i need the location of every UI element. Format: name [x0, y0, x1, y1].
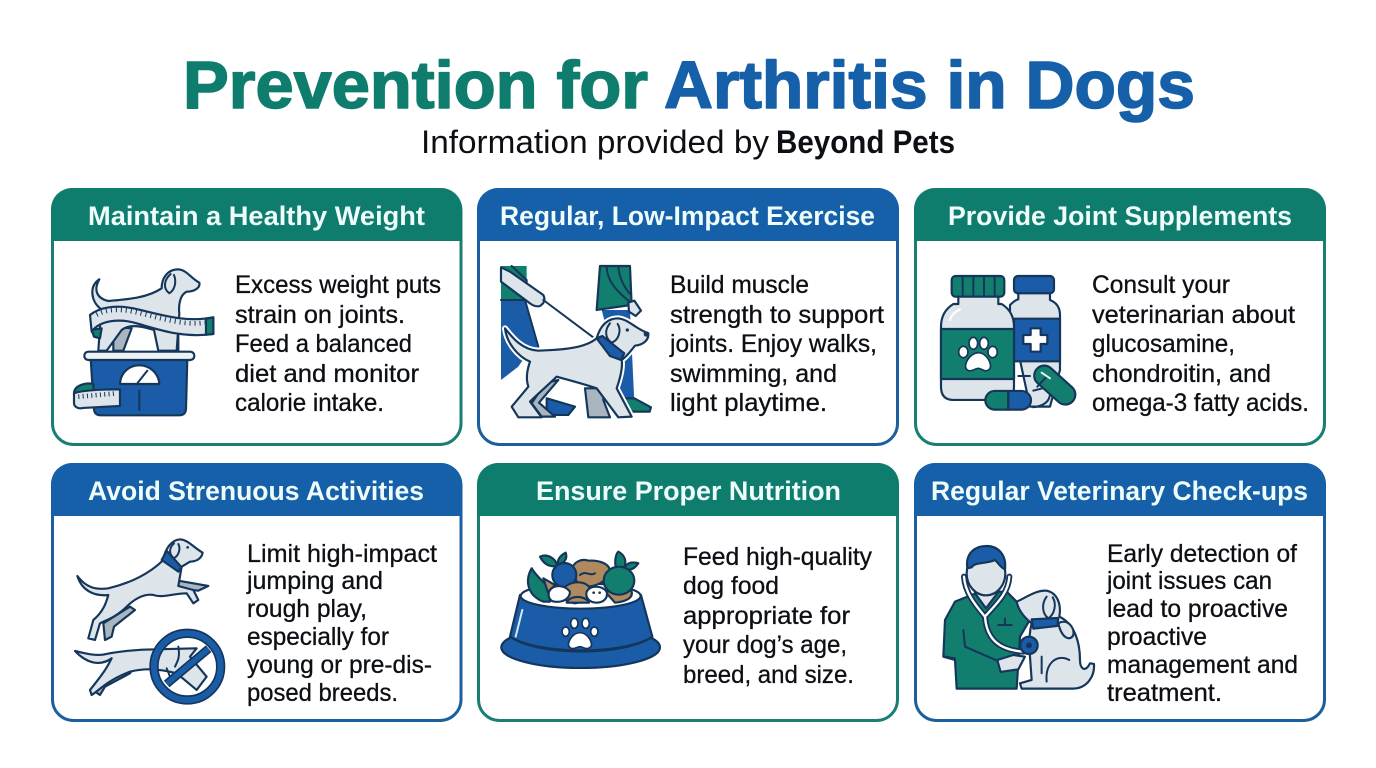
panel: ensure proper nutrition	[477, 463, 899, 720]
text block: maintain a healthy weight: Excess weight puts	[235, 271, 441, 299]
panel: maintain a healthy weight	[51, 188, 462, 444]
panel header: ensure proper nutrition	[477, 463, 899, 516]
subtitle	[421, 124, 955, 160]
icon: paw print on bowl	[562, 618, 598, 649]
text block: regular veterinary check-ups: lead to proactive	[1107, 595, 1288, 623]
text block: provide joint supplements: chondroitin, and	[1092, 360, 1271, 388]
text block: maintain a healthy weight: strain on joints.	[235, 301, 405, 329]
text block: regular low-impact exercise: Build muscle	[670, 271, 809, 299]
icon: veterinarian examining dog	[943, 546, 1094, 689]
text block: regular low-impact exercise: joints. Enjoy walks,	[669, 330, 877, 358]
panel header: regular veterinary check-ups	[914, 463, 1326, 516]
text block: avoid strenuous activities: especially for	[247, 623, 389, 651]
text block: maintain a healthy weight: Feed a balanced	[235, 330, 412, 358]
title: Arthritis in Dogs	[664, 48, 1195, 123]
text block: ensure proper nutrition: your dog’s age,	[683, 631, 847, 659]
panel header: provide joint supplements	[914, 188, 1326, 241]
icon: dog food bowl	[501, 552, 660, 668]
heading: ensure proper nutrition: Ensure Proper Nutrition	[536, 476, 841, 506]
icon: supplement bottles and capsules	[941, 276, 1079, 410]
panel header: regular low-impact exercise	[477, 188, 899, 241]
text block: ensure proper nutrition	[683, 543, 872, 689]
icon: jumping dog and prohibited jump	[75, 539, 221, 700]
text block: regular low-impact exercise: light playtime.	[670, 389, 827, 417]
text block: avoid strenuous activities: posed breeds.	[247, 679, 398, 707]
subtitle: Information provided by	[421, 124, 769, 160]
text block: provide joint supplements: omega-3 fatty acids.	[1092, 389, 1309, 417]
icon: person walking dog on leash	[501, 266, 651, 417]
text block: ensure proper nutrition: dog food	[683, 572, 779, 600]
title: Prevention for	[183, 48, 648, 123]
icon: paw print on bottle	[959, 337, 997, 371]
text block: avoid strenuous activities: Limit high-impact	[247, 540, 437, 568]
text block: avoid strenuous activities: young or pre-dis-	[247, 651, 432, 679]
text block: maintain a healthy weight: calorie intake.	[235, 389, 384, 417]
text block: regular low-impact exercise: strength to support	[670, 301, 884, 329]
panel: provide joint supplements	[914, 188, 1326, 444]
heading: provide joint supplements: Provide Joint Supplements	[948, 201, 1292, 231]
text block: avoid strenuous activities	[246, 540, 437, 707]
text block: maintain a healthy weight: diet and monitor	[235, 360, 419, 388]
text block: ensure proper nutrition: appropriate for	[683, 602, 850, 630]
panel: regular veterinary check-ups	[914, 463, 1326, 720]
text block: ensure proper nutrition: breed, and size.	[683, 661, 854, 689]
heading: regular veterinary check-ups: Regular Veterinary Check-ups	[931, 476, 1308, 506]
text block: avoid strenuous activities: rough play,	[247, 595, 367, 623]
text block: maintain a healthy weight	[235, 271, 441, 417]
text block: provide joint supplements: Consult your	[1092, 271, 1230, 299]
heading: maintain a healthy weight: Maintain a Healthy Weight	[88, 201, 425, 231]
text block: regular veterinary check-ups: management and	[1107, 651, 1298, 679]
panel: regular low-impact exercise	[477, 188, 899, 444]
text block: regular low-impact exercise	[669, 271, 884, 417]
heading: avoid strenuous activities: Avoid Strenuous Activities	[88, 476, 424, 506]
icon: dog on scale with tape measure	[74, 269, 213, 415]
text block: regular low-impact exercise: swimming, and	[670, 360, 837, 388]
text block: provide joint supplements: veterinarian about	[1092, 301, 1295, 329]
text block: regular veterinary check-ups: treatment.	[1107, 679, 1222, 707]
text block: regular veterinary check-ups: Early detection of	[1107, 540, 1297, 568]
text block: regular veterinary check-ups: joint issues can	[1106, 567, 1272, 595]
text block: ensure proper nutrition: Feed high-quality	[683, 543, 872, 571]
text block: regular veterinary check-ups: proactive	[1107, 623, 1207, 651]
text block: avoid strenuous activities: jumping and	[246, 567, 383, 595]
text block: provide joint supplements	[1092, 271, 1309, 417]
text block: regular veterinary check-ups	[1106, 540, 1298, 707]
panel header: maintain a healthy weight	[51, 188, 462, 241]
subtitle: Beyond Pets	[776, 124, 955, 160]
panel: avoid strenuous activities	[51, 463, 462, 720]
title	[183, 48, 1195, 123]
heading: regular low-impact exercise: Regular, Low-Impact Exercise	[500, 201, 875, 231]
panel header: avoid strenuous activities	[51, 463, 462, 516]
text block: provide joint supplements: glucosamine,	[1092, 330, 1235, 358]
